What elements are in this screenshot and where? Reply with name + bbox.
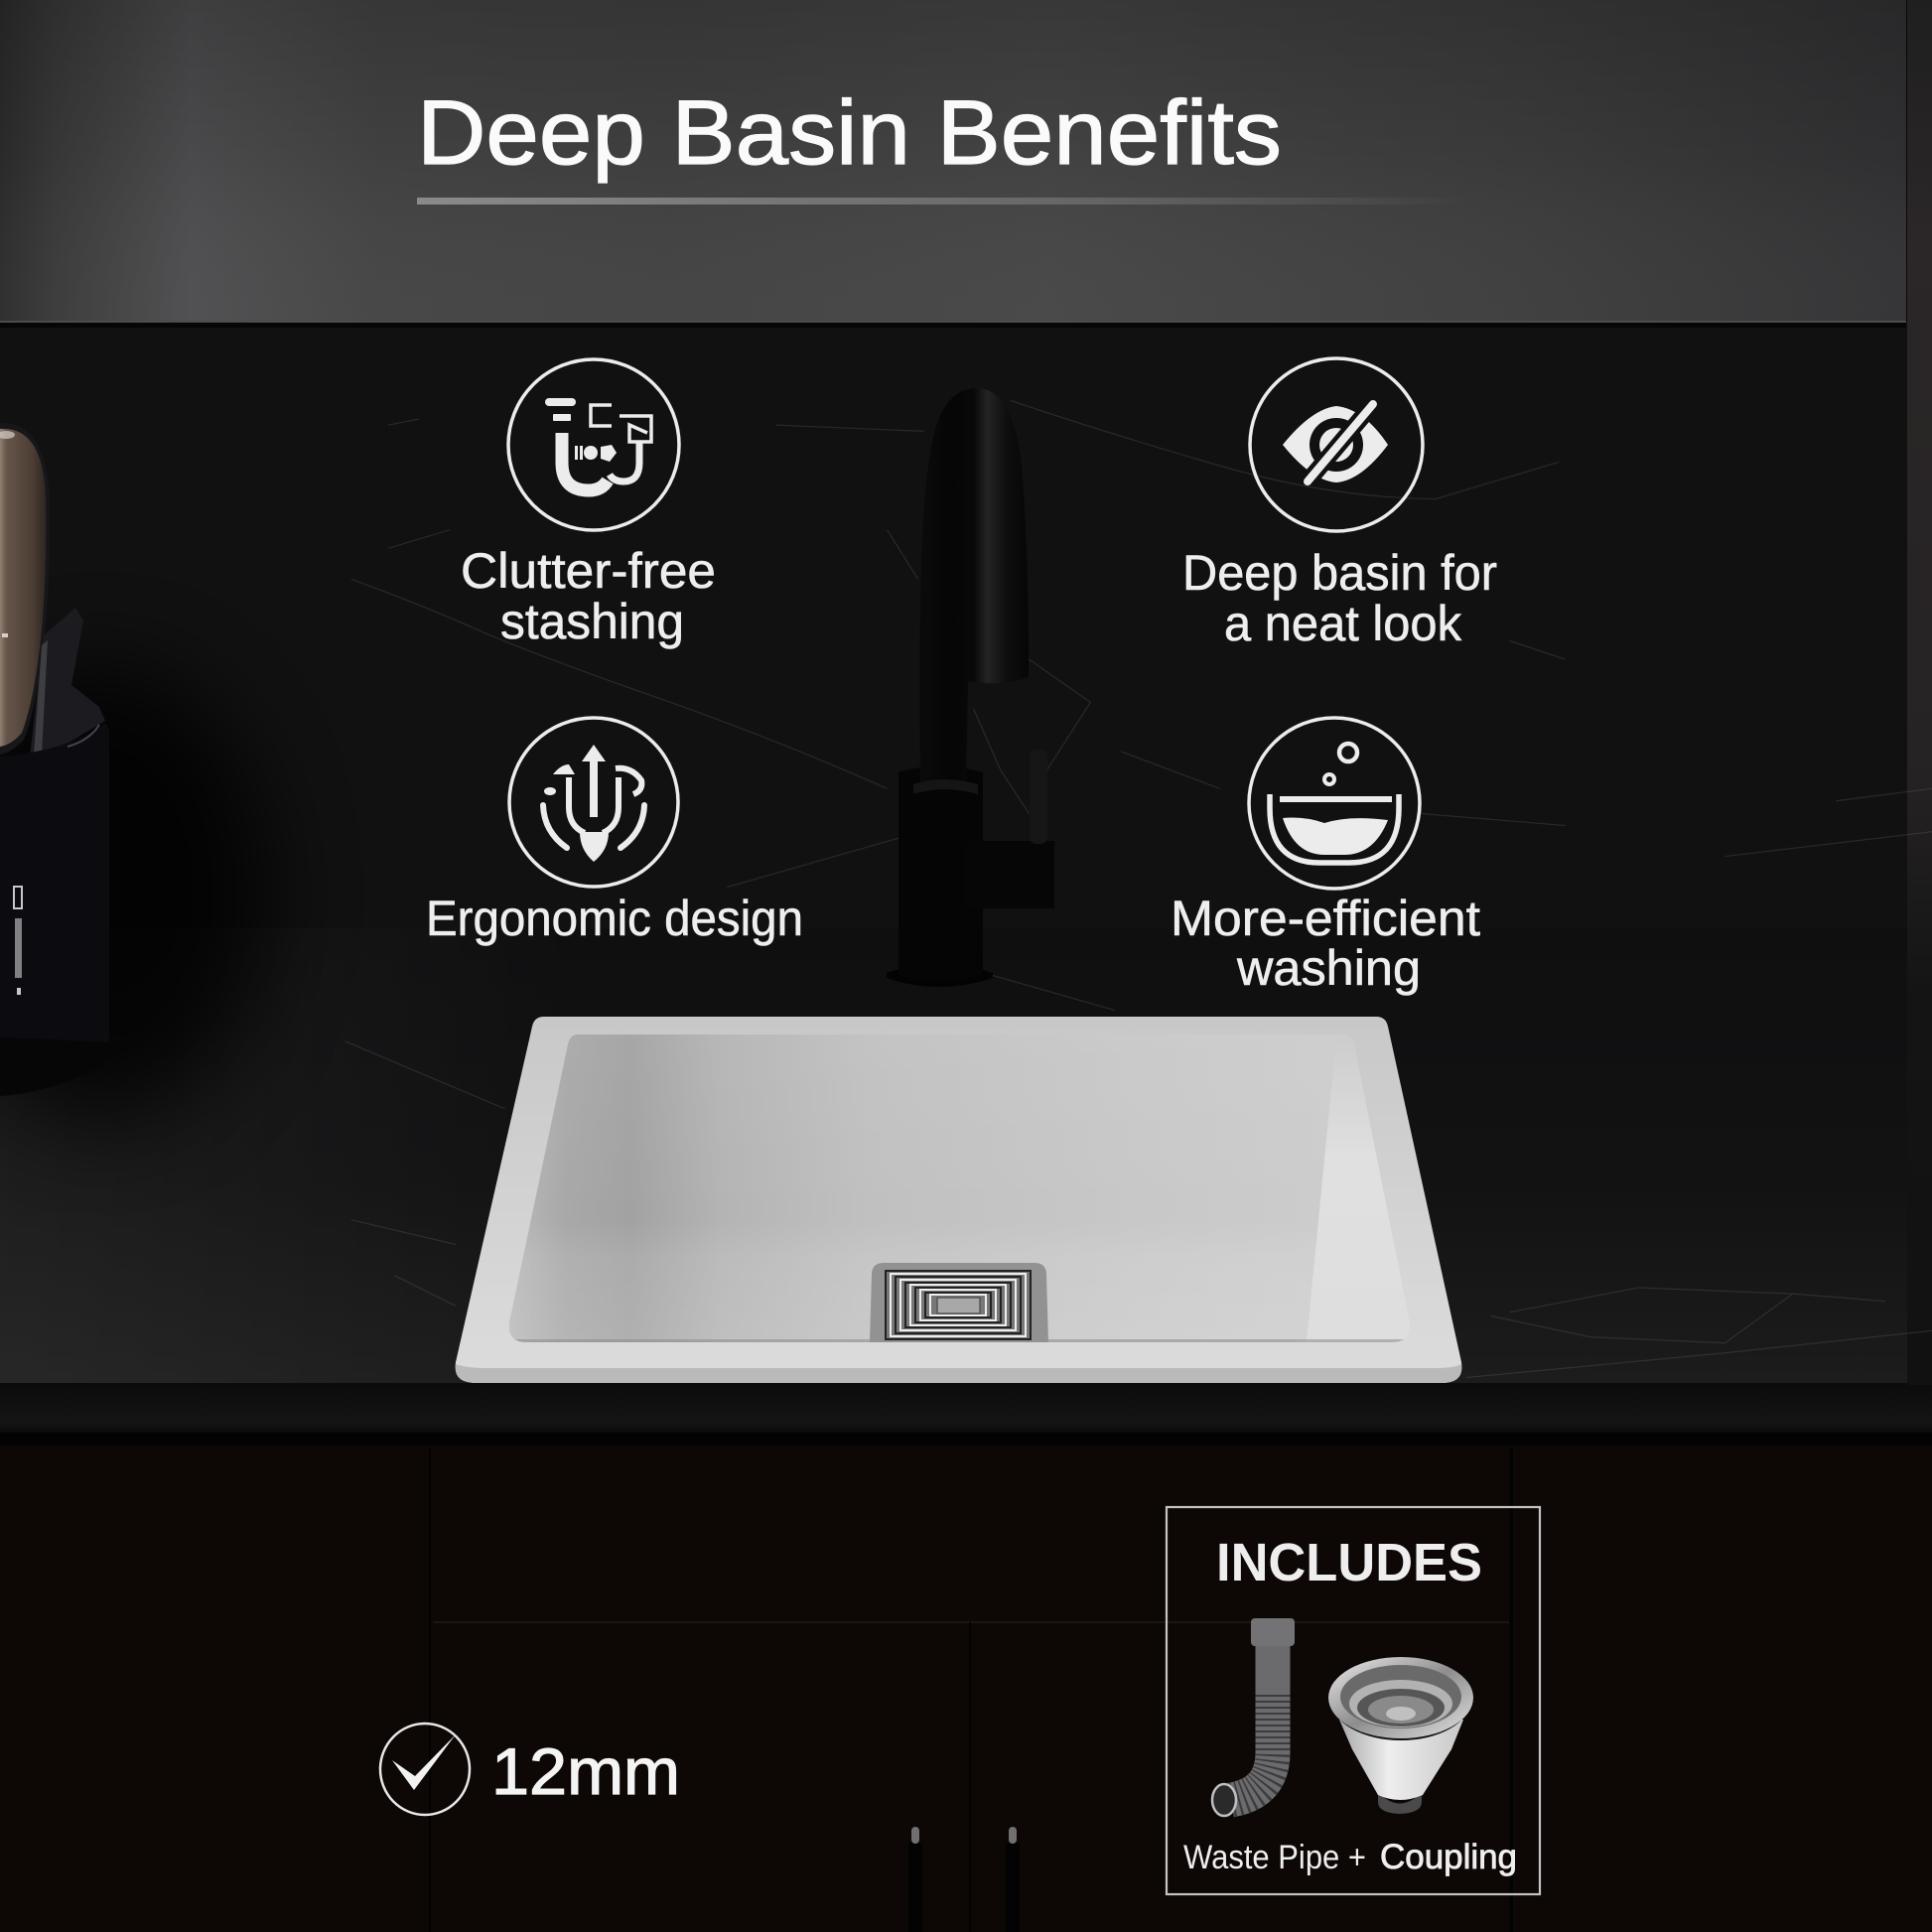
sink	[456, 1017, 1461, 1383]
panel frame	[1167, 1507, 1540, 1894]
icon: arrows around U	[509, 718, 678, 887]
benefit: ergonomic design	[426, 718, 803, 946]
label: More-efficient washing: More-efficient	[1171, 891, 1480, 946]
benefit: deep basin for a neat look	[1182, 358, 1497, 651]
faucet	[887, 388, 1054, 987]
label: More-efficient washing: washing	[1236, 940, 1421, 996]
label: Deep basin for a neat look: a neat look	[1224, 596, 1462, 651]
label: More-efficient washing	[1171, 891, 1480, 996]
coupling illustration	[1328, 1657, 1473, 1814]
icon: crossed eye	[1250, 358, 1423, 531]
sink front edge	[456, 1364, 1461, 1383]
label: Clutter-free stashing: stashing	[500, 594, 684, 649]
title: Deep Basin Benefits	[417, 82, 1282, 184]
benefit: more-efficient washing	[1171, 718, 1480, 996]
caption: Waste Pipe + Coupling: Waste Pipe +	[1183, 1839, 1366, 1876]
label: Deep basin for a neat look	[1182, 545, 1497, 651]
caption: Waste Pipe + Coupling	[1183, 1838, 1517, 1876]
icon: check in circle	[380, 1724, 470, 1815]
cabinet panel lines	[430, 1448, 1511, 1932]
icon: bowl with water and bubbles	[1249, 718, 1420, 889]
spec: 12mm thickness	[380, 1724, 680, 1815]
label: Ergonomic design: Ergonomic design	[426, 891, 803, 946]
label: Clutter-free stashing: Clutter-free	[461, 543, 716, 599]
upper wall panel	[0, 0, 1906, 328]
caption: Waste Pipe + Coupling: Coupling	[1380, 1838, 1517, 1876]
label: Clutter-free stashing	[461, 543, 716, 649]
sink basin	[501, 1033, 1420, 1345]
panel: includes	[1167, 1507, 1540, 1894]
left decor: brown bottle in black container	[0, 423, 112, 1096]
sink rim	[456, 1017, 1461, 1383]
label: 12mm: 12mm	[491, 1734, 680, 1808]
benefit: clutter-free stashing	[461, 359, 716, 649]
heading: INCLUDES: INCLUDES	[1216, 1533, 1482, 1592]
title underline	[417, 198, 1469, 205]
waste pipe illustration	[1212, 1618, 1295, 1816]
cabinet handles	[908, 1827, 1020, 1932]
label: Deep basin for a neat look: Deep basin for	[1182, 545, 1497, 601]
drain grate	[870, 1263, 1048, 1342]
icon: pipes and items	[508, 359, 679, 530]
